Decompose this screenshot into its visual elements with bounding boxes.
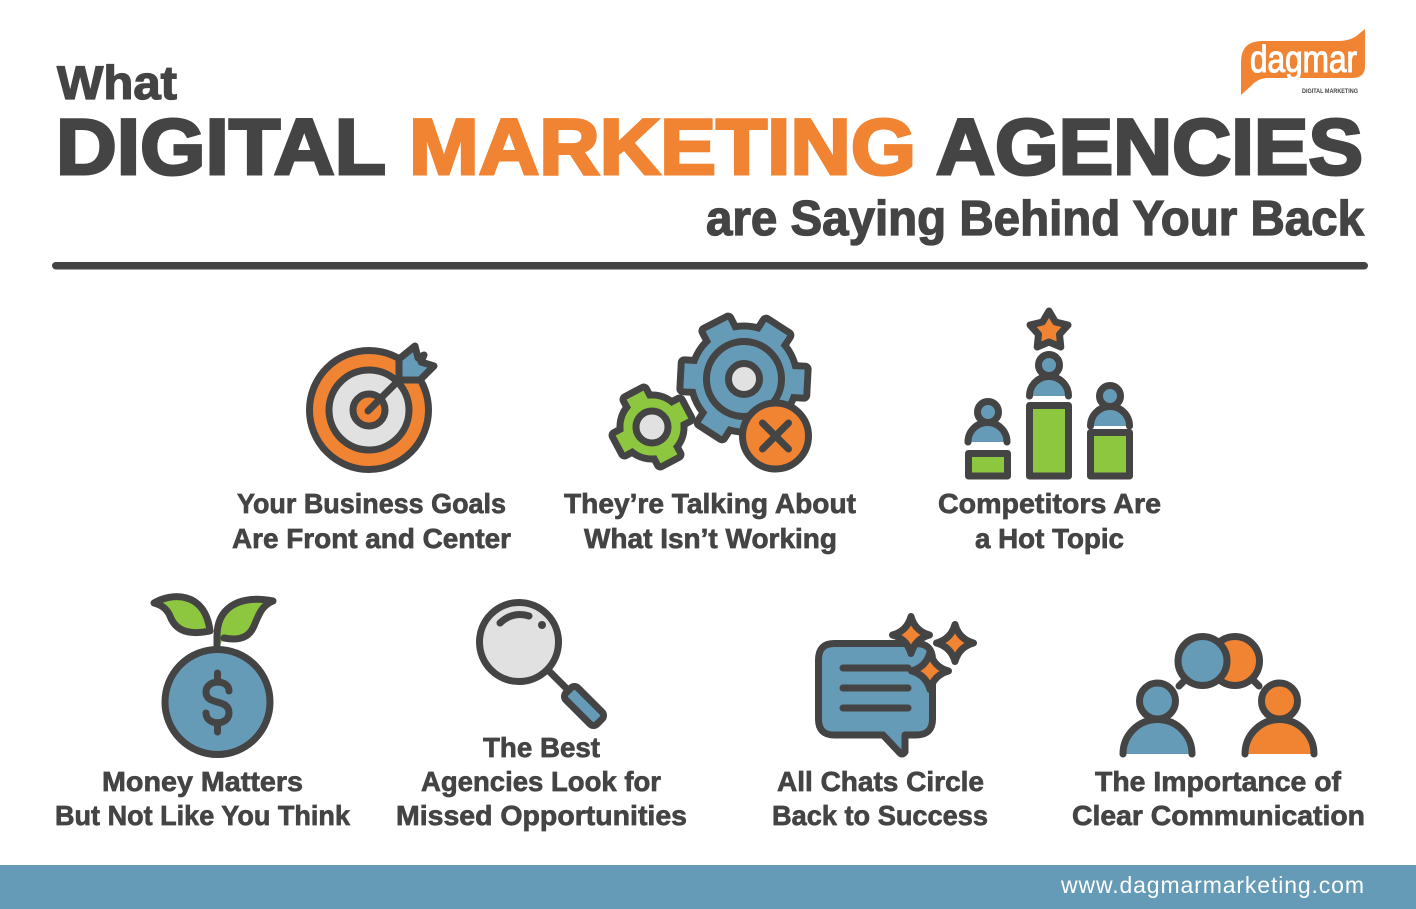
caption row 2: Missed Opportunities xyxy=(396,800,687,831)
footer bar: www.dagmarmarketing.com xyxy=(1060,872,1364,898)
caption row 1: a Hot Topic xyxy=(975,523,1124,554)
caption row 1: What Isn’t Working xyxy=(584,523,837,554)
icon: chat bubble with sparkles xyxy=(818,616,974,754)
caption row 2: The Importance of xyxy=(1095,766,1342,797)
icon: two people communicating xyxy=(1123,636,1314,754)
caption row 2 xyxy=(55,732,1365,831)
icon: gears with x xyxy=(611,315,808,469)
title: AGENCIES xyxy=(936,102,1363,191)
icon: competitors on podium with star xyxy=(968,311,1130,476)
footer bar xyxy=(0,865,1416,909)
caption row 2: Clear Communication xyxy=(1072,800,1365,831)
caption row 1 xyxy=(232,488,1161,554)
icon: magnifying glass xyxy=(480,602,606,728)
caption row 2: Agencies Look for xyxy=(421,766,661,797)
title xyxy=(56,56,1365,246)
caption row 2: The Best xyxy=(483,732,600,763)
title: DIGITAL xyxy=(56,102,386,191)
logo: dagmar: dagmar xyxy=(1250,39,1357,81)
title: are Saying Behind Your Back xyxy=(706,192,1365,246)
title: MARKETING xyxy=(409,102,916,191)
caption row 1: They’re Talking About xyxy=(564,488,856,519)
icon: target with arrow xyxy=(310,346,434,470)
caption row 2: All Chats Circle xyxy=(777,766,984,797)
icon: money plant xyxy=(154,597,273,754)
caption row 1: Your Business Goals xyxy=(237,488,506,519)
caption row 2: Back to Success xyxy=(772,800,988,831)
logo: dagmar xyxy=(1241,29,1365,95)
caption row 2: Money Matters xyxy=(102,766,303,797)
caption row 2: But Not Like You Think xyxy=(55,800,350,831)
caption row 1: Competitors Are xyxy=(938,488,1161,519)
title: What xyxy=(57,56,177,109)
caption row 1: Are Front and Center xyxy=(232,523,511,554)
logo: dagmar: DIGITAL MARKETING xyxy=(1302,88,1358,95)
